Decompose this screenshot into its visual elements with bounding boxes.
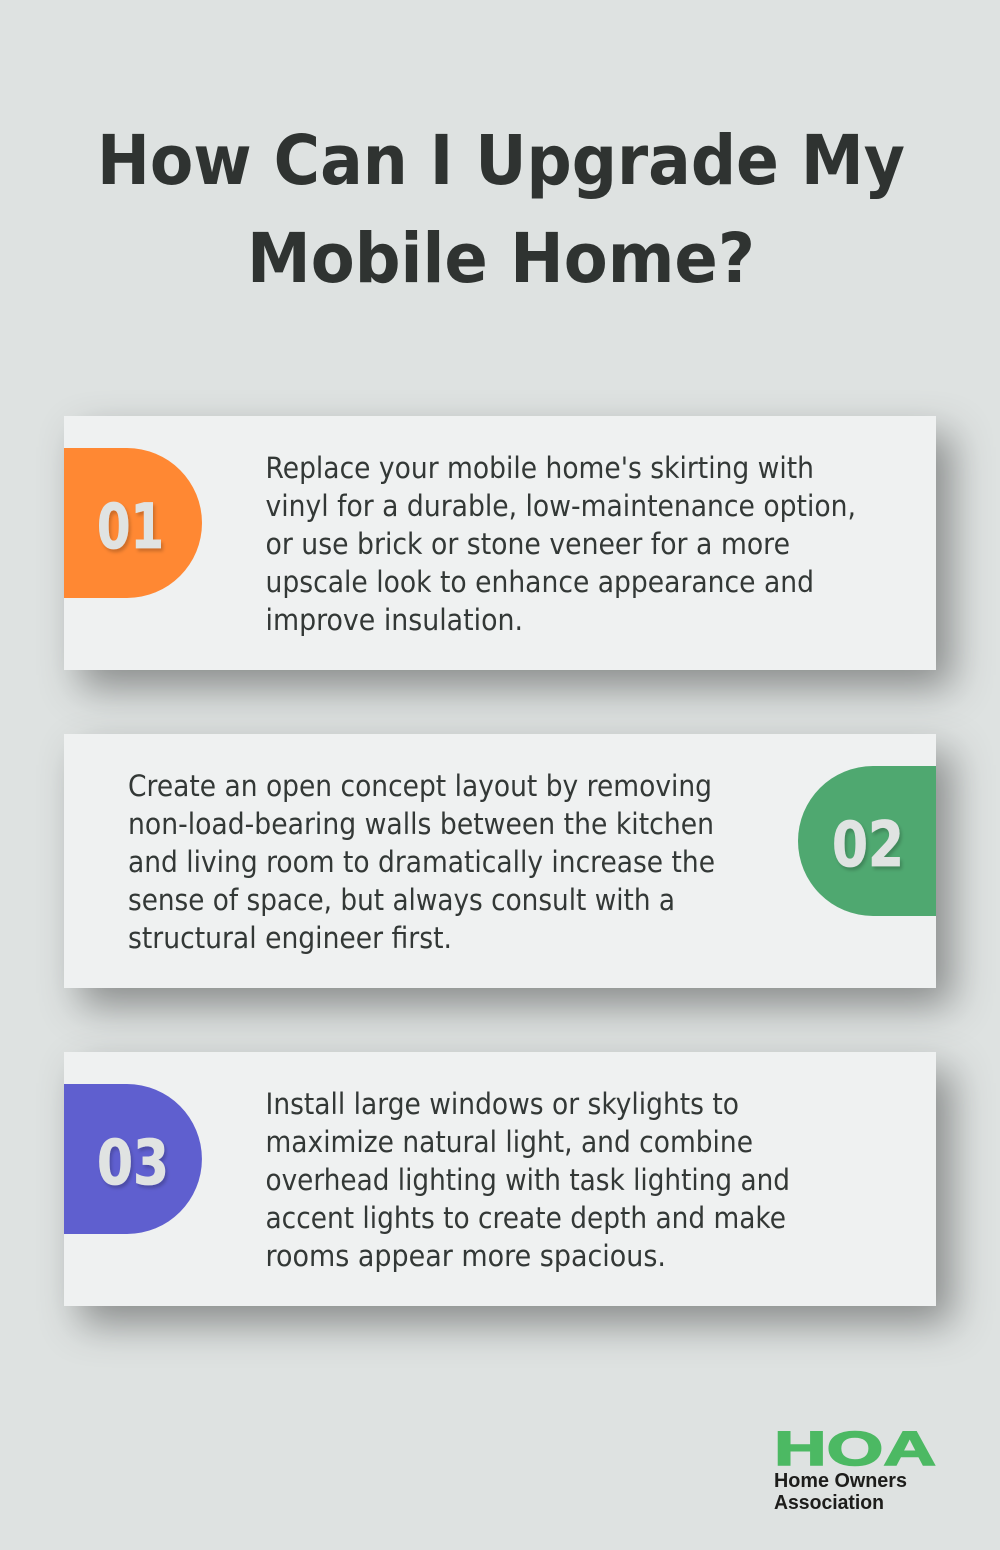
- text: step 01: Replace your mobile home's skirting with: [266, 451, 814, 485]
- text: step 03: Install large windows or skylights to: [266, 1087, 739, 1121]
- badge: 01: [64, 448, 202, 598]
- panel: step 01: [64, 416, 936, 670]
- text: step 01: vinyl for a durable, low-maintenance option,: [266, 489, 856, 523]
- text: step 03: [266, 1087, 790, 1273]
- title: How Can I Upgrade My: [97, 121, 905, 201]
- badge: 02: 02: [832, 808, 904, 881]
- text: step 02: and living room to dramatically increase the: [128, 845, 715, 879]
- logo: HOA Home Owners Association: [774, 1423, 936, 1514]
- text: step 03: overhead lighting with task lighting and: [266, 1163, 790, 1197]
- text: step 02: non-load-bearing walls between the kitchen: [128, 807, 714, 841]
- text: step 03: accent lights to create depth and make: [266, 1201, 786, 1235]
- panel: step 02: [64, 734, 936, 988]
- panel: step 03: [64, 1052, 936, 1306]
- badge: 01: 01: [97, 490, 164, 563]
- logo: HOA Home Owners Association: HOA: [774, 1423, 936, 1476]
- text: step 02: [128, 769, 715, 955]
- text: step 01: improve insulation.: [266, 603, 523, 637]
- title: [97, 121, 905, 299]
- logo: HOA Home Owners Association: Home Owners: [774, 1470, 907, 1492]
- text: step 01: [266, 451, 856, 637]
- badge: 02: [798, 766, 936, 916]
- badge: 03: [64, 1084, 202, 1234]
- title: Mobile Home?: [247, 219, 755, 299]
- text: step 01: upscale look to enhance appearance and: [266, 565, 814, 599]
- text: step 01: or use brick or stone veneer for a more: [266, 527, 790, 561]
- text: step 02: structural engineer first.: [128, 921, 452, 955]
- logo: HOA Home Owners Association: Association: [774, 1492, 884, 1514]
- text: step 02: Create an open concept layout by removing: [128, 769, 712, 803]
- badge: 03: 03: [97, 1126, 169, 1199]
- text: step 03: maximize natural light, and combine: [266, 1125, 753, 1159]
- text: step 02: sense of space, but always consult with a: [128, 883, 675, 917]
- text: step 03: rooms appear more spacious.: [266, 1239, 666, 1273]
